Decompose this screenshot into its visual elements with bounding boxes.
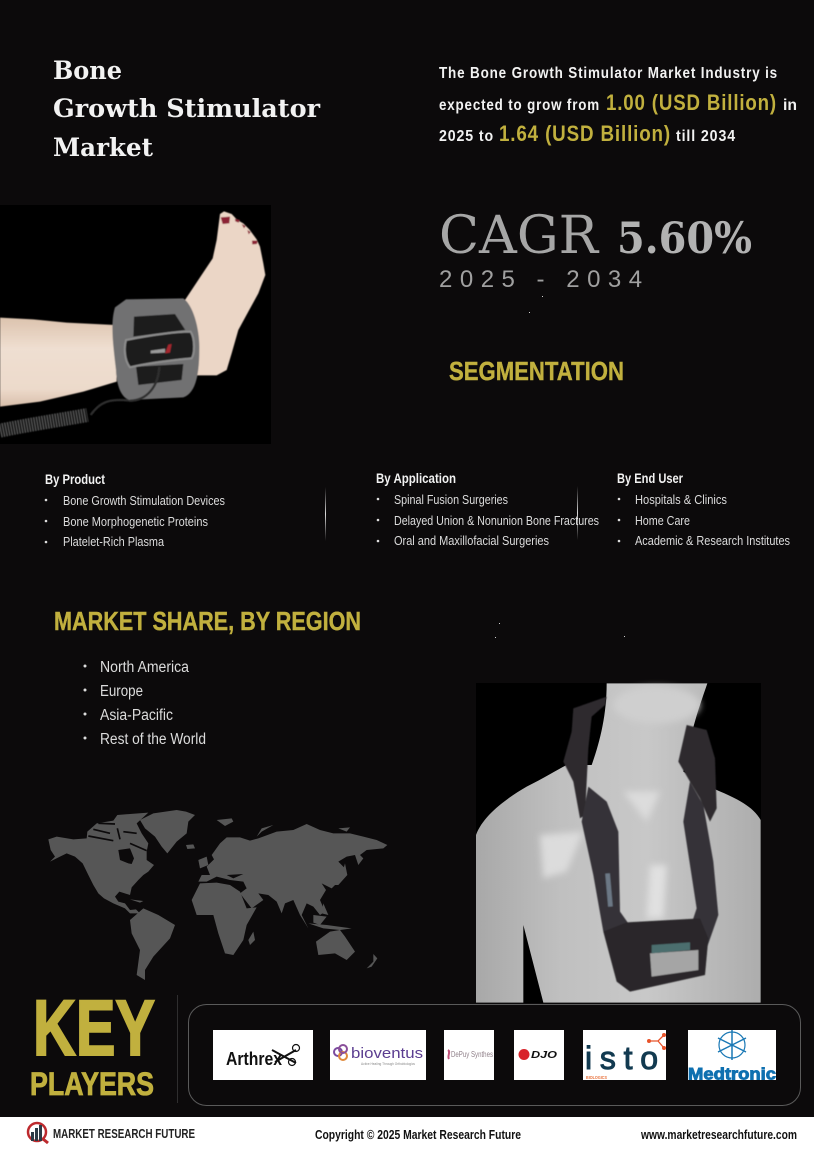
small specks — [495, 296, 625, 638]
logo: DJO — [514, 1030, 564, 1080]
title: Bone — [53, 56, 122, 85]
segment list: by application: By Application — [376, 471, 456, 486]
segment list: by application — [376, 471, 599, 548]
segment list: by product: Platelet-Rich Plasma — [63, 535, 164, 549]
CAGR figure: CAGR — [439, 206, 600, 266]
market summary text: till 2034 — [676, 128, 736, 145]
segment list: by product: Bone Morphogenetic Proteins — [63, 515, 208, 529]
footer: Copyright © 2025 Market Research Future — [315, 1128, 521, 1142]
logo: DJO: DJO — [531, 1050, 557, 1061]
region list: North America — [100, 659, 189, 676]
control unit housing — [603, 918, 708, 992]
segment list: by product: By Product — [45, 472, 105, 487]
segment list: by product: Bone Growth Stimulation Devices — [63, 494, 225, 508]
CAGR figure: 2025 - 2034 — [439, 266, 650, 293]
key players heading: KEY — [33, 983, 155, 1072]
segment list: by application: Oral and Maxillofacial Surgeries — [394, 534, 549, 548]
region list: Europe — [100, 683, 143, 700]
market summary text: in — [783, 97, 797, 114]
logo: bioventus: Active Healing Through Orthobiologics — [361, 1062, 415, 1066]
control unit screen — [650, 950, 698, 977]
control unit label — [652, 942, 690, 953]
stimulator windows — [133, 314, 185, 385]
region list — [84, 659, 206, 748]
segment list: by end user: Hospitals & Clinics — [635, 493, 727, 507]
logo: isto biologics: BIOLOGICS — [586, 1075, 607, 1080]
market summary text: 1.64 (USD Billion) — [499, 121, 671, 146]
title: Growth Stimulator — [53, 94, 321, 123]
region list: Asia-Pacific — [100, 707, 173, 724]
cord — [91, 367, 159, 415]
key players panel — [188, 1004, 800, 1106]
stimulator body — [112, 298, 199, 400]
heading: market share by region: MARKET SHARE, BY REGION — [54, 606, 361, 636]
segment list: by application: Delayed Union & Nonunion Bone Fractures — [394, 514, 599, 528]
heading: segmentation: SEGMENTATION — [449, 356, 624, 386]
footer: MARKET RESEARCH FUTURE — [53, 1127, 195, 1141]
toenails — [221, 217, 258, 244]
chest highlights — [540, 792, 660, 878]
segment list: by end user: Academic & Research Institutes — [635, 534, 790, 548]
neck shading — [613, 687, 700, 723]
logo: Medtronic: Medtronic — [688, 1064, 776, 1084]
photo: cervical stimulator on mannequin — [476, 683, 761, 1003]
footer logo icon — [28, 1123, 48, 1143]
photo: ankle bone stimulator — [0, 205, 271, 444]
segment list: by application: Spinal Fusion Surgeries — [394, 493, 508, 507]
stimulator band — [125, 332, 194, 367]
market summary text: expected to grow from — [439, 97, 600, 114]
market summary text: 1.00 (USD Billion) — [606, 90, 777, 115]
segment list: by end user — [617, 471, 790, 548]
strap left — [582, 787, 628, 942]
stimulator logo — [165, 344, 172, 353]
market summary text — [439, 65, 797, 146]
key players heading — [30, 983, 155, 1102]
strap logo — [605, 873, 613, 907]
cord coil — [0, 415, 87, 431]
CAGR figure: 5.60% — [617, 214, 752, 264]
footer — [0, 1117, 814, 1150]
foot — [185, 211, 265, 375]
logo: DePuy Synthes — [444, 1030, 494, 1080]
logo: bioventus: bioventus — [351, 1045, 423, 1062]
strap right — [683, 782, 718, 948]
CAGR figure — [439, 206, 752, 293]
mannequin torso — [476, 683, 761, 1003]
lower leg — [0, 318, 117, 407]
segment list: by product — [45, 472, 225, 549]
title — [53, 56, 321, 162]
logo: Arthrex — [213, 1030, 313, 1080]
logo: bioventus — [330, 1030, 426, 1080]
title: Market — [53, 133, 153, 162]
logo: Medtronic — [688, 1030, 776, 1084]
logo: DePuy Synthes: DePuy Synthes — [451, 1050, 493, 1059]
region list: Rest of the World — [100, 731, 206, 748]
segment list: by end user: By End User — [617, 471, 684, 486]
logo: isto biologics: isto — [585, 1040, 658, 1076]
logo: Arthrex: Arthrex — [226, 1049, 282, 1069]
market summary text: 2025 to — [439, 128, 494, 145]
segment list: by end user: Home Care — [635, 514, 690, 528]
collar pads — [563, 697, 607, 818]
logo: isto biologics — [583, 1030, 666, 1080]
key players heading: PLAYERS — [30, 1066, 154, 1102]
world map — [48, 810, 387, 980]
